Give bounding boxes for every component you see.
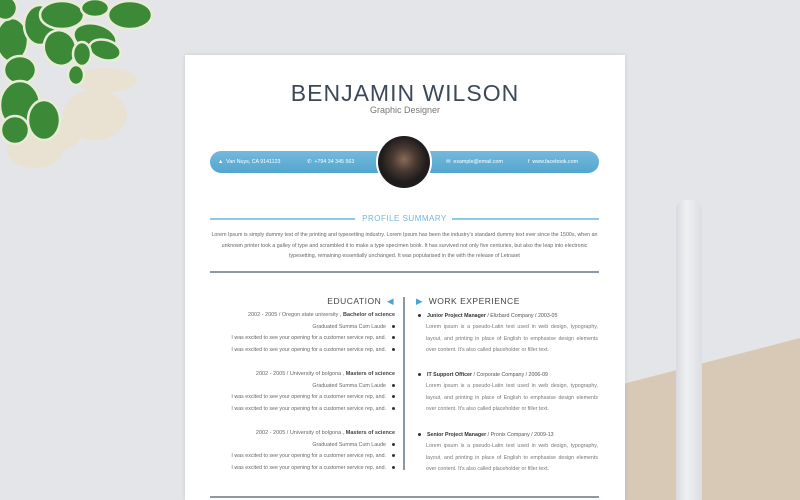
education entries: I was excited to see your opening for a customer service rep, and.	[231, 453, 386, 459]
work entries: Lorem ipsum is a pseudo-Latin text used in web design, typography,	[426, 324, 598, 330]
work entries: layout, and printing in place of English to emphasise design elements	[426, 395, 598, 401]
education entries: I was excited to see your opening for a customer service rep, and.	[231, 335, 386, 341]
work entries: over content. It's also called placeholder or filler text.	[426, 466, 549, 472]
education entries: Graduated Summa Cum Laude	[312, 383, 386, 389]
contact bar: ✆ +794 34 345 563	[307, 159, 354, 165]
contact bar	[210, 151, 599, 173]
photo	[376, 134, 432, 190]
plant decoration	[0, 0, 153, 168]
work entries: over content. It's also called placeholder or filler text.	[426, 347, 549, 353]
work entries: Junior Project Manager / Elizbard Company / 2003-05	[427, 313, 557, 319]
subtitle: Graphic Designer	[370, 105, 440, 115]
pen	[676, 200, 702, 500]
contact bar: f www.facebook.com	[528, 159, 578, 165]
education entries: 2002 - 2005 / University of bolgona , Masters of science	[256, 371, 395, 377]
education entries: 2002 - 2005 / University of bolgona , Masters of science	[256, 430, 395, 436]
contact bar: ✉ example@email.com	[446, 159, 503, 165]
work entries: Senior Project Manager / Pronix Company / 2009-13	[427, 432, 554, 438]
work entries: over content. It's also called placeholder or filler text.	[426, 406, 549, 412]
heading: profile summary: PROFILE SUMMARY	[362, 214, 447, 223]
education entries: Graduated Summa Cum Laude	[312, 324, 386, 330]
work entries: layout, and printing in place of English to emphasise design elements	[426, 336, 598, 342]
profile paragraph: Lorem Ipsum is simply dummy text of the printing and typesetting industry. Lorem Ipsum has been the industry's standard dummy text ever since the 1500s, when an unknown printer took a galley of type and scrambled it to make a type specimen book. It has survived not only five centuries, but also the leap into electronic typesetting, remaining essentially unchanged. It was popularised in the with the release of Letraset	[211, 232, 598, 259]
education entries	[231, 312, 395, 471]
resume paper	[185, 55, 625, 500]
work entries: layout, and printing in place of English to emphasise design elements	[426, 455, 598, 461]
heading: education: EDUCATION ◀	[327, 296, 394, 306]
heading: work experience: ▶ WORK EXPERIENCE	[416, 296, 520, 306]
education entries: 2002 - 2005 / Oregon state university , Bachelor of science	[248, 312, 395, 318]
education entries: I was excited to see your opening for a customer service rep, and.	[231, 347, 386, 353]
title: name: BENJAMIN WILSON	[291, 80, 519, 106]
education entries: I was excited to see your opening for a customer service rep, and.	[231, 465, 386, 471]
education entries: Graduated Summa Cum Laude	[312, 442, 386, 448]
work entries: Lorem ipsum is a pseudo-Latin text used in web design, typography,	[426, 383, 598, 389]
education entries: I was excited to see your opening for a customer service rep, and.	[231, 406, 386, 412]
work entries: Lorem ipsum is a pseudo-Latin text used in web design, typography,	[426, 443, 598, 449]
divider vertical	[403, 297, 405, 470]
education entries: I was excited to see your opening for a customer service rep, and.	[231, 394, 386, 400]
contact bar: ▲ Van Nuys, CA 9141123	[218, 159, 280, 165]
work entries: IT Support Officer / Corporate Company / 2006-09	[427, 372, 548, 378]
